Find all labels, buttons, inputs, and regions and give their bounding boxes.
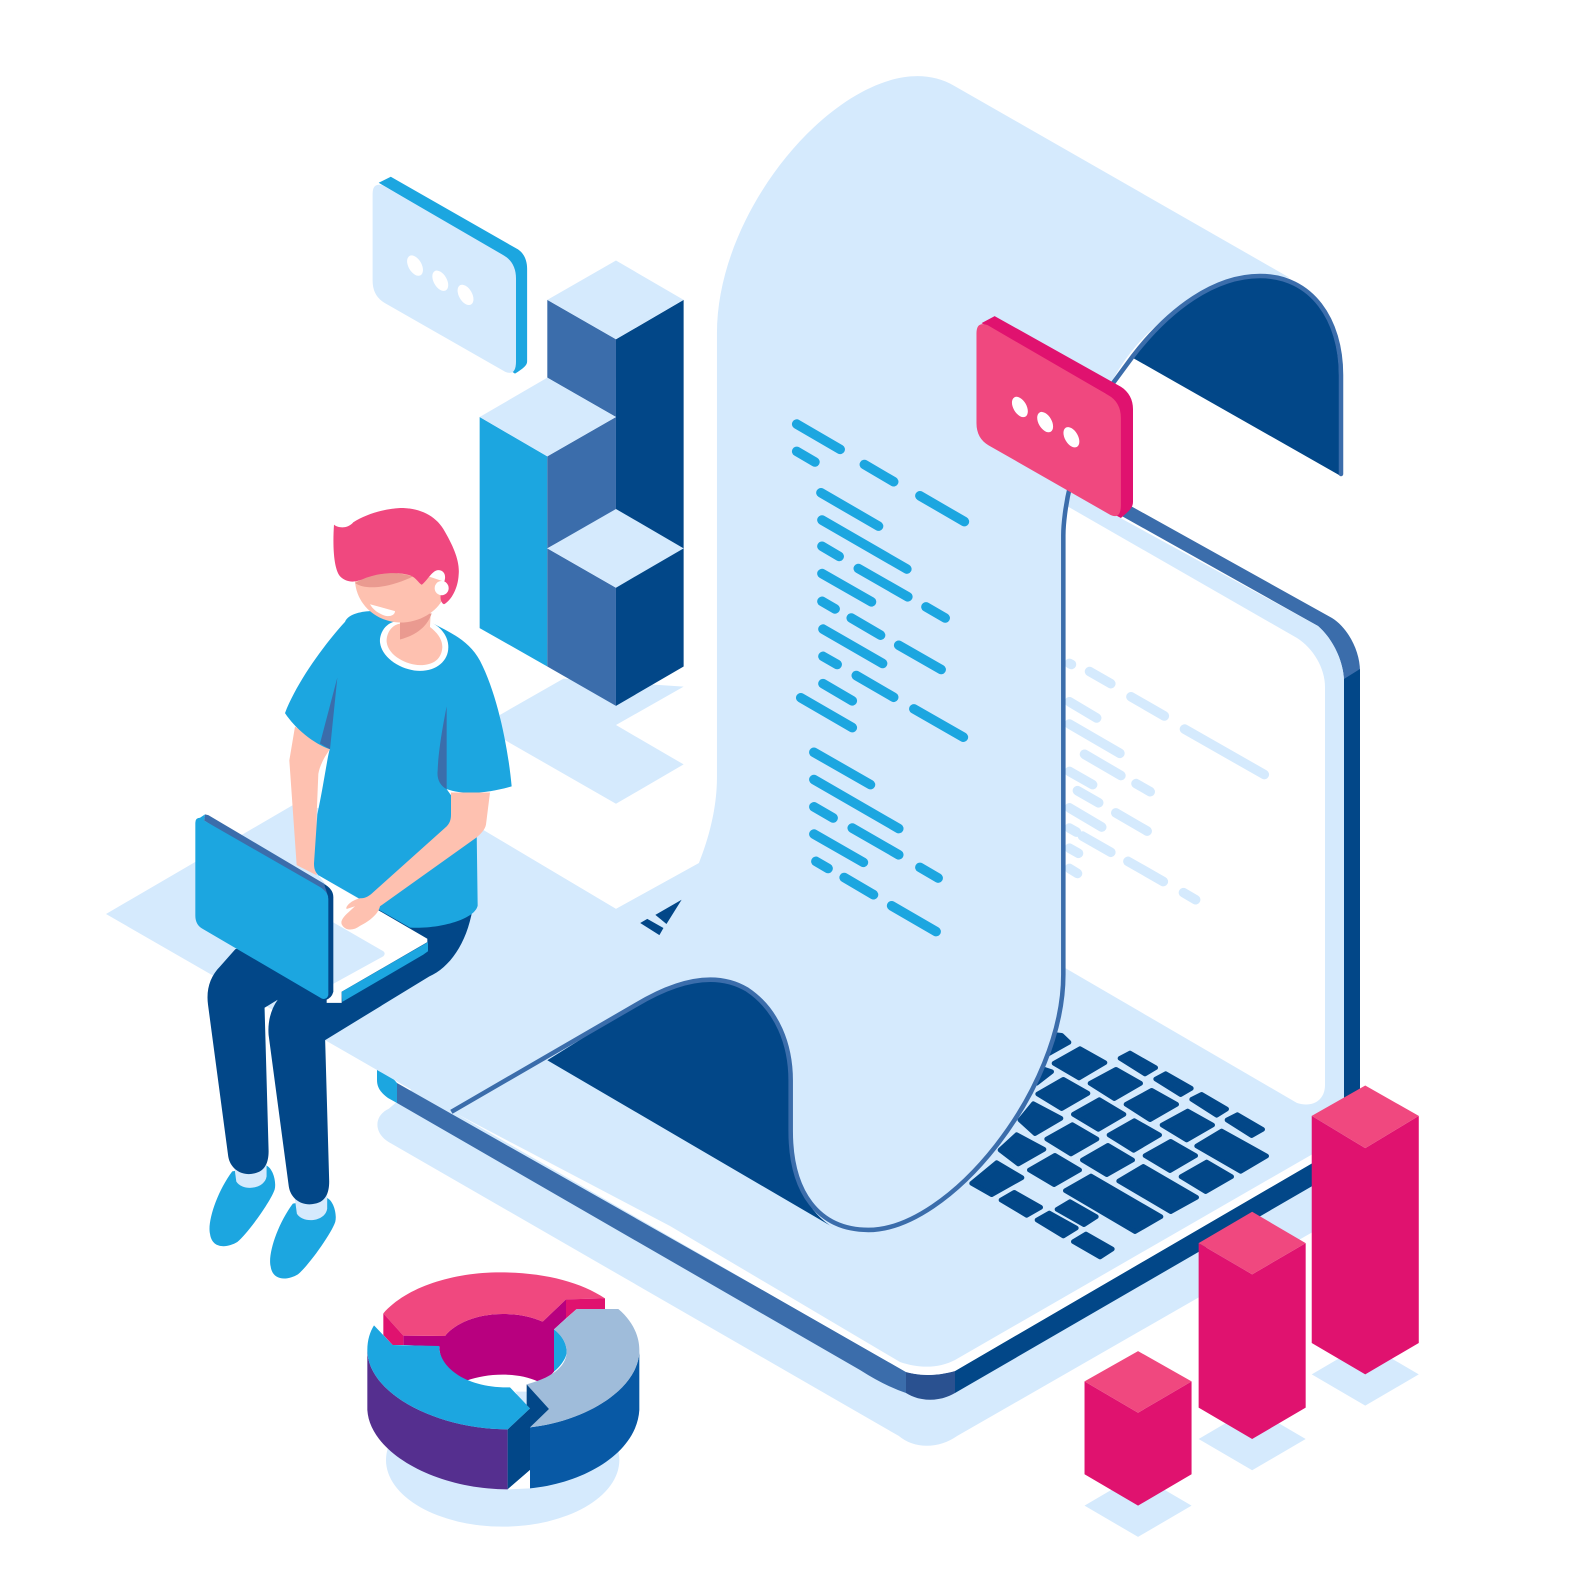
hair	[333, 508, 459, 604]
donut shadow	[386, 1393, 619, 1527]
donut sides	[367, 1350, 639, 1489]
grey segment	[527, 1309, 639, 1427]
navy arrow	[527, 1384, 549, 1427]
keyboard	[972, 1033, 1267, 1257]
pink bar small	[1085, 1351, 1192, 1537]
block shadow	[500, 679, 684, 804]
cyan segment	[367, 1325, 567, 1429]
pink segment	[383, 1272, 605, 1403]
laptop lid	[195, 814, 333, 1000]
front arm and hand	[341, 792, 490, 930]
face	[355, 570, 443, 623]
light chat bubble	[373, 177, 527, 374]
collar and neck	[380, 613, 448, 671]
donut chart	[367, 1272, 639, 1527]
bottom paper curl	[451, 485, 1070, 1230]
isometric blocks	[480, 261, 684, 706]
back arm	[289, 727, 330, 875]
person upper body	[195, 508, 512, 1003]
shirt folds	[320, 678, 447, 789]
top paper curl	[1108, 276, 1341, 475]
earring	[435, 581, 449, 595]
pink bar large	[1312, 1086, 1419, 1406]
screen text lines	[1069, 663, 1264, 900]
laptop base	[318, 875, 428, 1003]
icon: small arrow marks	[640, 900, 682, 935]
pink bar medium	[1199, 1212, 1306, 1470]
paper sheet	[325, 76, 1290, 1230]
big laptop body	[106, 485, 1360, 1400]
shirt	[285, 611, 512, 928]
paper text lines	[797, 424, 964, 932]
person legs and shoes	[208, 889, 473, 1279]
laptop ground shadow	[377, 1010, 1313, 1446]
pink chat bubble	[976, 316, 1133, 518]
